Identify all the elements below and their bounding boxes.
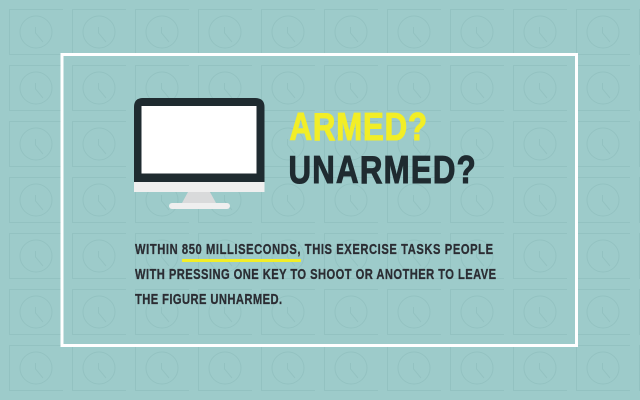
text block: description <box>135 241 496 307</box>
icon: desktop monitor <box>134 98 264 209</box>
yellow underline highlight <box>182 259 301 262</box>
white frame panel <box>62 54 576 346</box>
text block: description: WITH PRESSING ONE KEY TO SHOOT OR ANOTHER TO LEAVE <box>135 266 496 282</box>
heading: unarmed: UNARMED? <box>288 149 476 192</box>
text block: description: THE FIGURE UNHARMED. <box>135 291 282 307</box>
text block: description: WITHIN 850 MILLISECONDS, THIS EXERCISE TASKS PEOPLE <box>135 241 493 257</box>
heading: armed: ARMED? <box>290 106 427 149</box>
